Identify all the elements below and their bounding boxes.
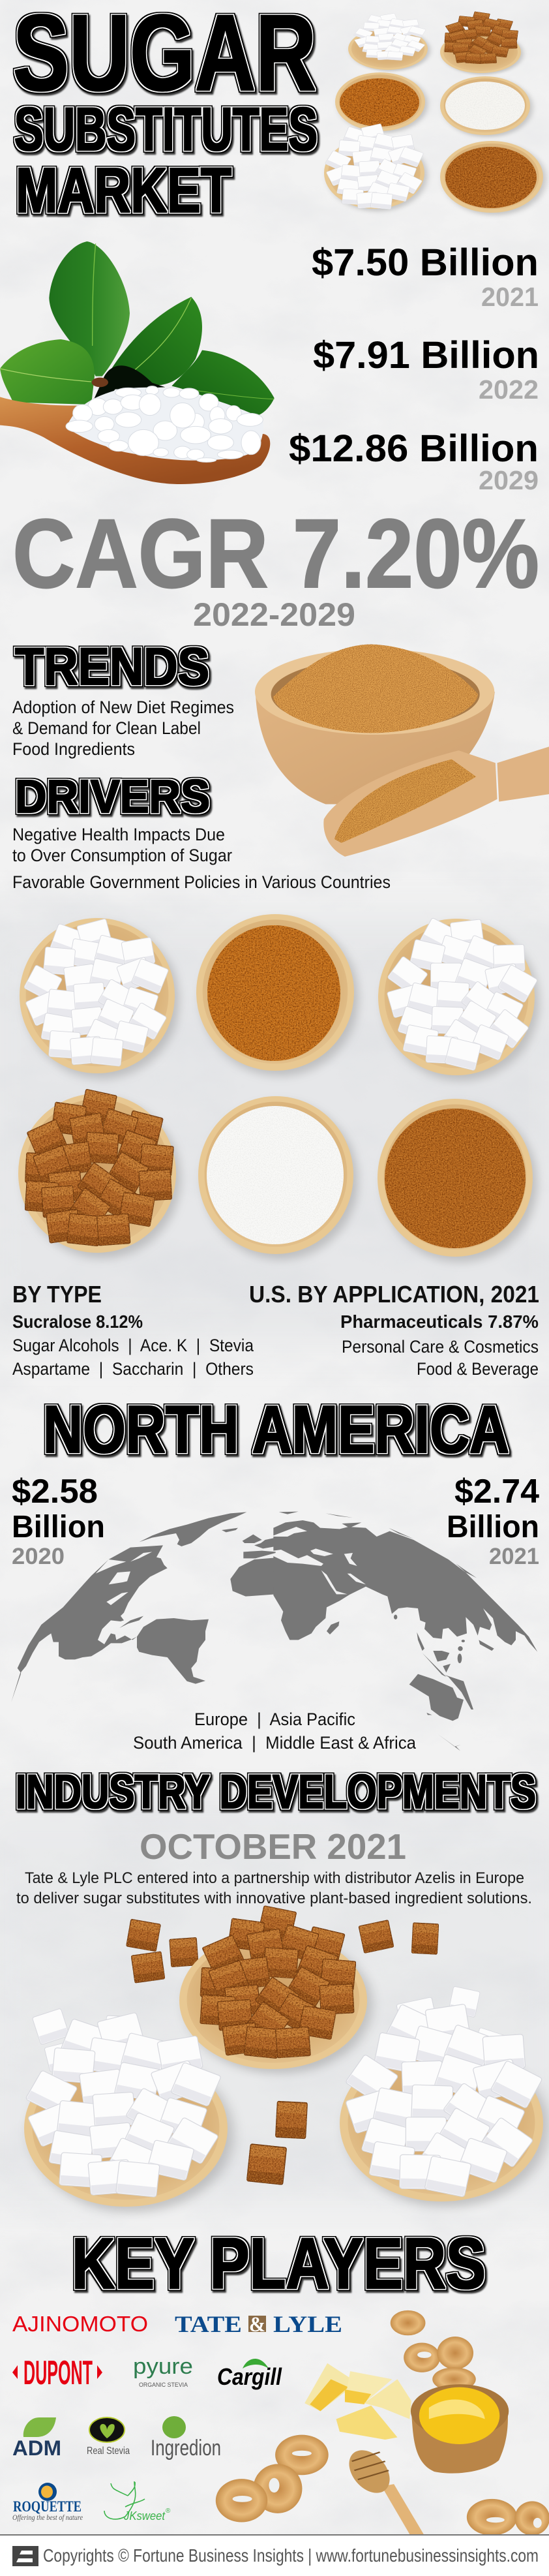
development description: Tate & Lyle PLC entered into a partnership with distributor Azelis in Europe	[25, 1869, 524, 1887]
image: bowls of sugar cubes	[24, 1906, 549, 2212]
logo: ADM	[12, 2417, 61, 2460]
logo: Real Stevia	[87, 2417, 130, 2457]
heading: trends: TRENDS	[15, 637, 209, 696]
segment: by type: Sugar Alcohols | Ace. K | Stevia	[12, 1336, 254, 1355]
footer bar	[0, 2534, 549, 2576]
segment: by type: Sucralose 8.12%	[12, 1311, 143, 1332]
heading: drivers: DRIVERS	[15, 771, 210, 823]
logo: Pyure organic stevia: pyure	[133, 2354, 193, 2379]
stat: 2021 market size: $7.50 Billion	[312, 241, 539, 284]
stat: 2022 market size: $7.91 Billion	[313, 334, 539, 376]
map: Americas and west Africa	[11, 1512, 276, 1702]
trends text: Adoption of New Diet Regimes	[12, 698, 234, 717]
bowl: brown granulated sugar	[378, 1099, 537, 1262]
loose brown cubes	[126, 1919, 439, 2185]
image: six large bowls of sugar types	[18, 908, 545, 1262]
stat: north america 2021	[447, 1473, 539, 1569]
stat: 2022 market size: 2022	[479, 375, 539, 405]
bowl: white granulated sugar	[198, 1096, 358, 1259]
stat: north america 2021: Billion	[447, 1510, 539, 1544]
logo: Tate & Lyle: LYLE	[273, 2311, 342, 2337]
logo: Real Stevia: Real Stevia	[87, 2446, 130, 2457]
bowl: brown cubes	[179, 1906, 373, 2074]
stat: 2029 market size: $12.86 Billion	[289, 427, 539, 470]
logo: ADM: ADM	[12, 2436, 61, 2460]
logo: DuPont	[12, 2354, 102, 2392]
logo: Ingredion: Ingredion	[151, 2436, 221, 2461]
stat: north america 2020: Billion	[12, 1510, 105, 1544]
stat: 2022 market size	[313, 334, 539, 405]
logo: Ingredion	[151, 2416, 221, 2461]
title: SUBSTITUTES	[14, 95, 318, 163]
logo: DuPont: DUPONT	[23, 2354, 93, 2392]
bowl: brown sugar cubes	[18, 1089, 181, 1259]
trends text: & Demand for Clean Label	[12, 718, 201, 738]
image: donuts, butter, ghee and honey dipper	[216, 2310, 549, 2536]
trends text	[12, 698, 234, 759]
drivers text: to Over Consumption of Sugar	[12, 846, 232, 865]
image: wooden bowl and scoop of brown sugar	[255, 645, 549, 857]
logo: Pyure organic stevia	[133, 2354, 193, 2388]
segment: by type: Aspartame | Saccharin | Others	[12, 1359, 254, 1379]
map: Africa, Eurasia and Oceania	[273, 1512, 537, 1751]
bowl: white sugar cubes	[20, 918, 179, 1079]
drivers text: Negative Health Impacts Due	[12, 825, 225, 844]
title: MARKET	[16, 155, 231, 226]
stat: north america 2020: 2020	[12, 1544, 65, 1569]
stat: north america 2021: 2021	[489, 1544, 539, 1569]
regions list	[133, 1710, 417, 1753]
development date: OCTOBER 2021	[140, 1826, 406, 1867]
trends text: Food Ingredients	[12, 739, 135, 759]
stat: 2029 market size	[289, 427, 539, 495]
segment: by type	[12, 1281, 254, 1379]
bowl: white cubes, right	[334, 1993, 549, 2207]
logo: Pyure organic stevia: ORGANIC STEVIA	[139, 2382, 188, 2388]
logo: Roquette: ROQUETTE	[13, 2498, 82, 2515]
logo: JK Sweet	[104, 2481, 171, 2522]
image: six small bowls of sugar	[324, 12, 546, 215]
logo: Tate & Lyle: TATE	[175, 2311, 242, 2337]
logo: Tate & Lyle	[175, 2311, 342, 2337]
logo: Cargill: Cargill	[217, 2363, 282, 2390]
logo: Roquette: Offering the best of nature	[12, 2513, 83, 2522]
logo: JK Sweet: JKsweet	[123, 2509, 166, 2522]
logo: Roquette	[12, 2483, 83, 2522]
segment: U.S. by application: Pharmaceuticals 7.87%	[340, 1311, 539, 1332]
stat: 2021 market size: 2021	[481, 282, 539, 312]
stat: 2021 market size	[312, 241, 539, 312]
bowl: white cubes, left	[24, 2012, 233, 2212]
regions list: South America | Middle East & Africa	[133, 1733, 417, 1753]
drivers text: Favorable Government Policies in Various Countries	[12, 872, 391, 892]
logo: Tate & Lyle: &	[249, 2313, 265, 2337]
development description: to deliver sugar substitutes with innovative plant-based ingredient solutions.	[16, 1890, 532, 1907]
stat: 2029 market size: 2029	[479, 465, 539, 495]
drivers text	[12, 825, 391, 892]
stat: north america 2021: $2.74	[454, 1473, 539, 1510]
bowl: orange granules	[196, 914, 359, 1076]
segment: by type: BY TYPE	[12, 1281, 102, 1308]
stat: north america 2020	[12, 1473, 105, 1569]
icon: Fortune Business Insights logo	[12, 2546, 38, 2566]
CAGR period: 2022-2029	[193, 596, 355, 633]
logo: JK Sweet: ®	[166, 2507, 171, 2515]
title	[13, 0, 318, 226]
world map	[11, 1512, 537, 1751]
segment: U.S. by application	[249, 1281, 539, 1379]
bowl: white chunks	[376, 908, 545, 1081]
image: leaves and sweetener tablets on wooden spoon	[0, 241, 274, 484]
regions list: Europe | Asia Pacific	[194, 1710, 355, 1729]
logo: Ajinomoto: AJINOMOTO	[12, 2312, 148, 2336]
stat: north america 2020: $2.58	[12, 1473, 98, 1510]
loose white cubes	[32, 1986, 506, 2072]
development description	[16, 1869, 532, 1907]
